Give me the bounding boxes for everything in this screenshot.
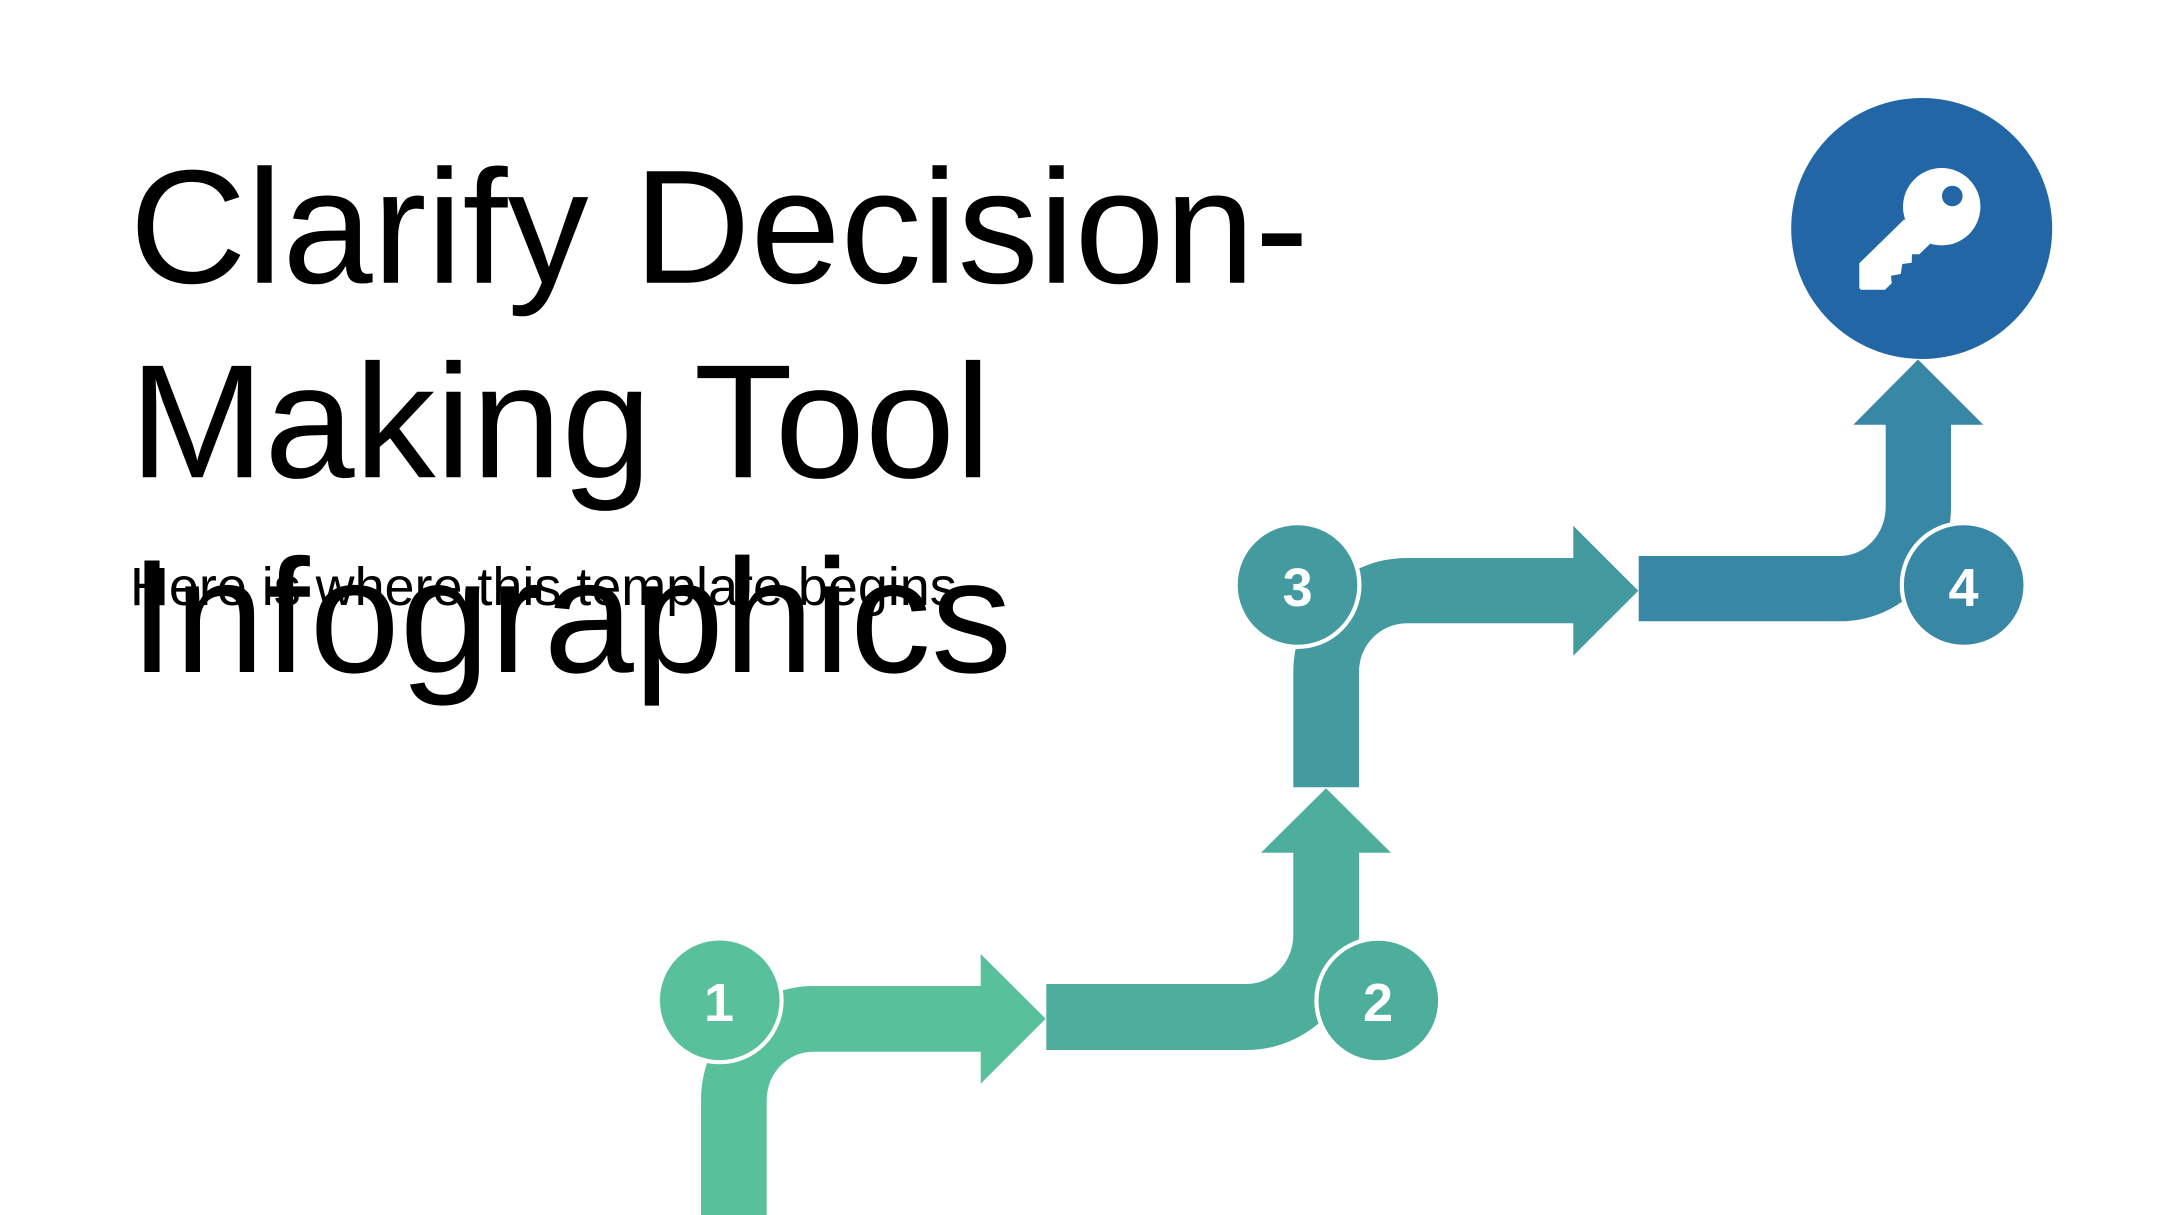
step 4 bbox=[1639, 360, 2028, 649]
subtitle: Here is where this template begins bbox=[130, 557, 957, 617]
badge 3 bbox=[1234, 521, 1362, 649]
arrow 2 bbox=[1046, 788, 1391, 1050]
goal circle with key icon bbox=[1791, 98, 2052, 359]
badge 4 bbox=[1900, 521, 2028, 649]
badge 2 bbox=[1314, 936, 1442, 1064]
title: Infographics bbox=[130, 526, 1012, 707]
step 1 bbox=[656, 936, 1046, 1215]
step 3 bbox=[1234, 521, 1638, 787]
arrow 3 bbox=[1293, 526, 1638, 787]
badge 3: 3 bbox=[1283, 558, 1313, 618]
badge 1: 1 bbox=[704, 973, 734, 1033]
step 2 bbox=[1046, 788, 1442, 1064]
arrow 4 bbox=[1639, 360, 1983, 621]
badge 4: 4 bbox=[1948, 558, 1979, 618]
badge 1 bbox=[656, 936, 784, 1064]
title: Clarify Decision- bbox=[130, 137, 1309, 318]
badge 2: 2 bbox=[1363, 973, 1393, 1033]
arrow 1 bbox=[701, 954, 1046, 1215]
title: Making Tool bbox=[130, 331, 991, 512]
icon: key bbox=[1859, 168, 1980, 290]
